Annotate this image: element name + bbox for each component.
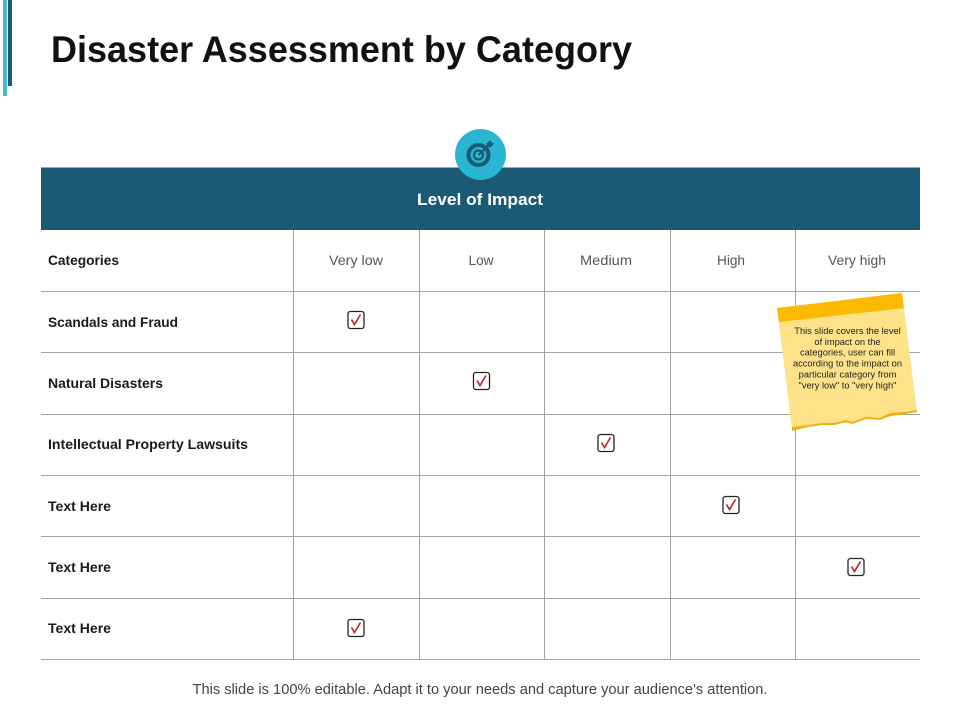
column headings: High <box>717 252 745 268</box>
row labels: Scandals and Fraud <box>48 314 178 330</box>
table <box>41 168 920 660</box>
note text: of impact on the <box>814 337 881 347</box>
note text: This slide covers the level <box>794 326 901 336</box>
column headings <box>48 252 886 268</box>
column headings: Low <box>468 252 494 268</box>
column headings: Medium <box>580 252 632 268</box>
footer note: This slide is 100% editable. Adapt it to your needs and capture your audience's attention. <box>192 682 768 698</box>
check marks <box>348 312 864 636</box>
note text: according to the impact on <box>793 358 902 368</box>
row labels <box>48 314 248 636</box>
row labels: Text Here <box>48 498 111 514</box>
table header band <box>41 168 920 230</box>
column headings: Very high <box>828 252 886 268</box>
note text: categories, user can fill <box>800 348 895 358</box>
title: Disaster Assessment by Category <box>51 29 632 70</box>
row labels: Text Here <box>48 620 111 636</box>
column headings: Very low <box>329 252 384 268</box>
row labels: Natural Disasters <box>48 375 163 391</box>
note text: "very low" to "very high" <box>799 380 896 390</box>
column headings: Categories <box>48 252 119 268</box>
icon: target <box>455 129 506 180</box>
accent bars <box>3 0 12 96</box>
row labels: Text Here <box>48 559 111 575</box>
header label: Level of Impact <box>417 190 543 209</box>
row labels: Intellectual Property Lawsuits <box>48 436 248 452</box>
sticky note <box>777 293 917 431</box>
note text <box>793 326 902 390</box>
note text: particular category from <box>799 370 897 380</box>
